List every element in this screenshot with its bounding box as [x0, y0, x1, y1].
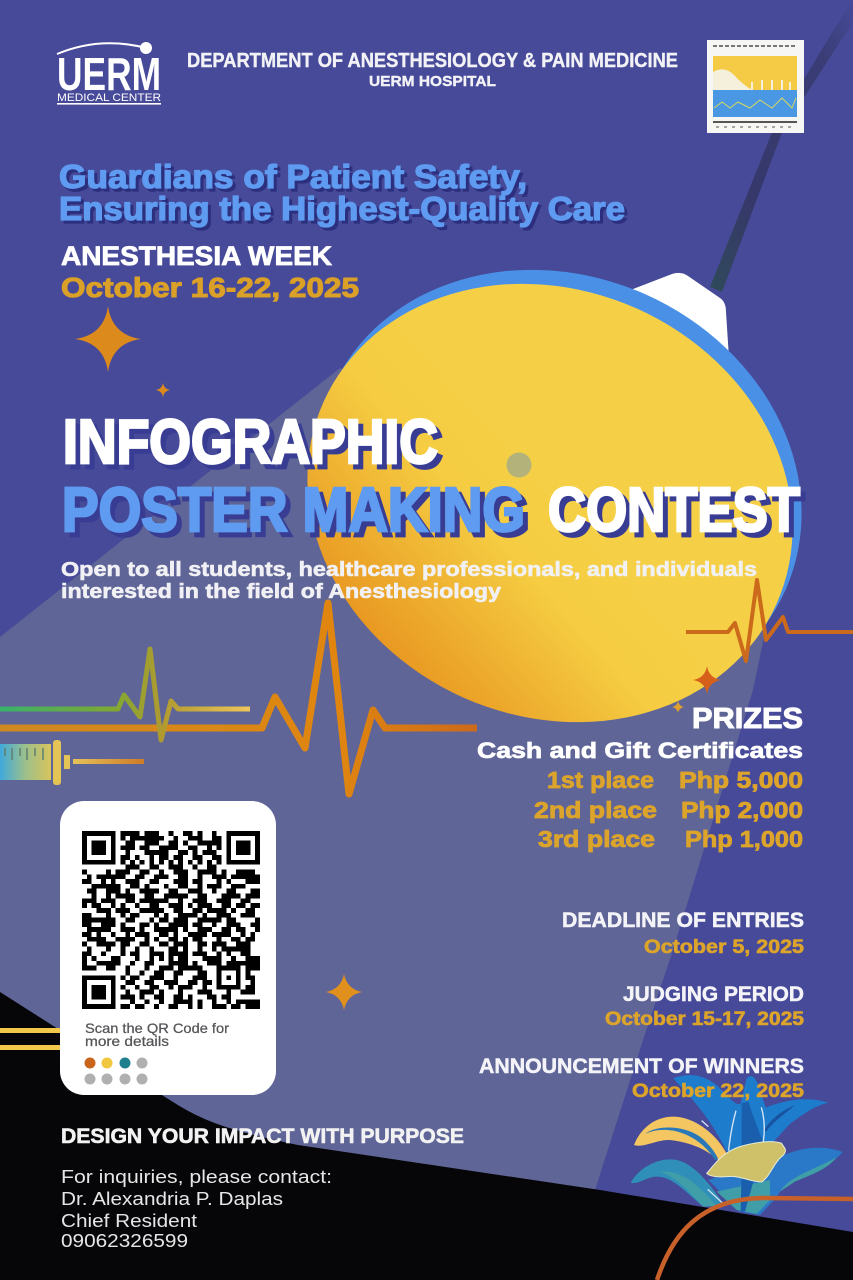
header text — [187, 50, 678, 90]
icon: star on lamp — [693, 666, 721, 694]
header text: DEPARTMENT OF ANESTHESIOLOGY & PAIN MEDICINE — [187, 50, 678, 72]
QR caption: Scan the QR Code for — [85, 1020, 229, 1036]
theme heading — [59, 158, 625, 227]
panel: prizes: 3rd place — [538, 826, 655, 852]
contest title: POSTER MAKING — [62, 476, 525, 545]
lamp light — [237, 208, 853, 798]
ECG line: orange — [0, 603, 477, 794]
orange curve — [657, 1198, 853, 1280]
logo: UERM Medical Center — [57, 42, 161, 105]
lamp cap — [628, 273, 729, 358]
ECG line: green — [0, 649, 250, 740]
panel: schedule: October 15-17, 2025 — [605, 1009, 804, 1030]
logo: Anesthesiology department seal — [707, 40, 804, 133]
panel: schedule: JUDGING PERIOD — [623, 983, 804, 1006]
yellow stripes — [0, 1028, 62, 1050]
panel: schedule: ANNOUNCEMENT OF WINNERS — [479, 1055, 804, 1078]
panel: prizes: 2nd place — [534, 797, 657, 823]
icon: star near QR — [326, 974, 362, 1010]
tagline: DESIGN YOUR IMPACT WITH PURPOSE — [61, 1125, 464, 1148]
contact details: For inquiries, please contact: — [61, 1167, 332, 1187]
contact details: 09062326599 — [61, 1231, 188, 1251]
panel: prizes — [477, 703, 803, 852]
theme heading: Guardians of Patient Safety, — [59, 158, 527, 195]
panel: prizes: Cash and Gift Certificates — [477, 738, 803, 763]
logo: UERM Medical Center: MEDICAL CENTER — [57, 92, 161, 104]
contact details: Dr. Alexandria P. Daplas — [61, 1189, 283, 1209]
theme heading: Ensuring the Highest-Quality Care — [59, 190, 625, 227]
QR code — [82, 831, 260, 1009]
icon: small star — [156, 383, 170, 397]
palette dots — [84, 1058, 148, 1084]
contest title: INFOGRAPHIC — [63, 408, 438, 477]
panel: prizes: 1st place — [547, 767, 654, 793]
event dates: October 16-22, 2025 — [61, 272, 359, 303]
logo: UERM Medical Center: UERM — [57, 48, 161, 100]
lamp rim — [246, 194, 853, 784]
eligibility text — [61, 559, 757, 603]
anesthesia week: ANESTHESIA WEEK — [61, 241, 333, 271]
panel: prizes: Php 1,000 — [685, 826, 803, 852]
QR caption — [85, 1020, 229, 1049]
light beam — [0, 368, 780, 1190]
lamp post — [710, 0, 853, 292]
header text: UERM HOSPITAL — [369, 73, 496, 90]
contact details: Chief Resident — [61, 1211, 197, 1231]
panel: schedule: October 5, 2025 — [644, 937, 804, 958]
icon: plant — [631, 1075, 843, 1215]
panel: schedule — [479, 909, 804, 1102]
icon: large star — [75, 306, 141, 372]
contest title — [62, 408, 800, 545]
icon: tiny star — [672, 701, 684, 713]
panel: schedule: DEADLINE OF ENTRIES — [562, 909, 804, 932]
icon: syringe — [0, 740, 144, 785]
contact details — [61, 1167, 332, 1251]
panel: schedule: October 22, 2025 — [632, 1081, 804, 1102]
panel: prizes: PRIZES — [692, 703, 803, 735]
panel: prizes: Php 5,000 — [679, 767, 803, 793]
black footer shape — [0, 992, 853, 1280]
eligibility text: Open to all students, healthcare professionals, and individuals — [61, 559, 757, 581]
panel: prizes: Php 2,000 — [681, 797, 803, 823]
QR caption: more details — [85, 1033, 169, 1049]
panel: QR card — [60, 801, 276, 1095]
eligibility text: interested in the field of Anesthesiology — [61, 581, 502, 603]
contest title: CONTEST — [548, 476, 800, 545]
icon: surgical lamp — [237, 194, 853, 798]
lamp dot — [506, 452, 532, 478]
ECG line: top right — [686, 580, 853, 661]
